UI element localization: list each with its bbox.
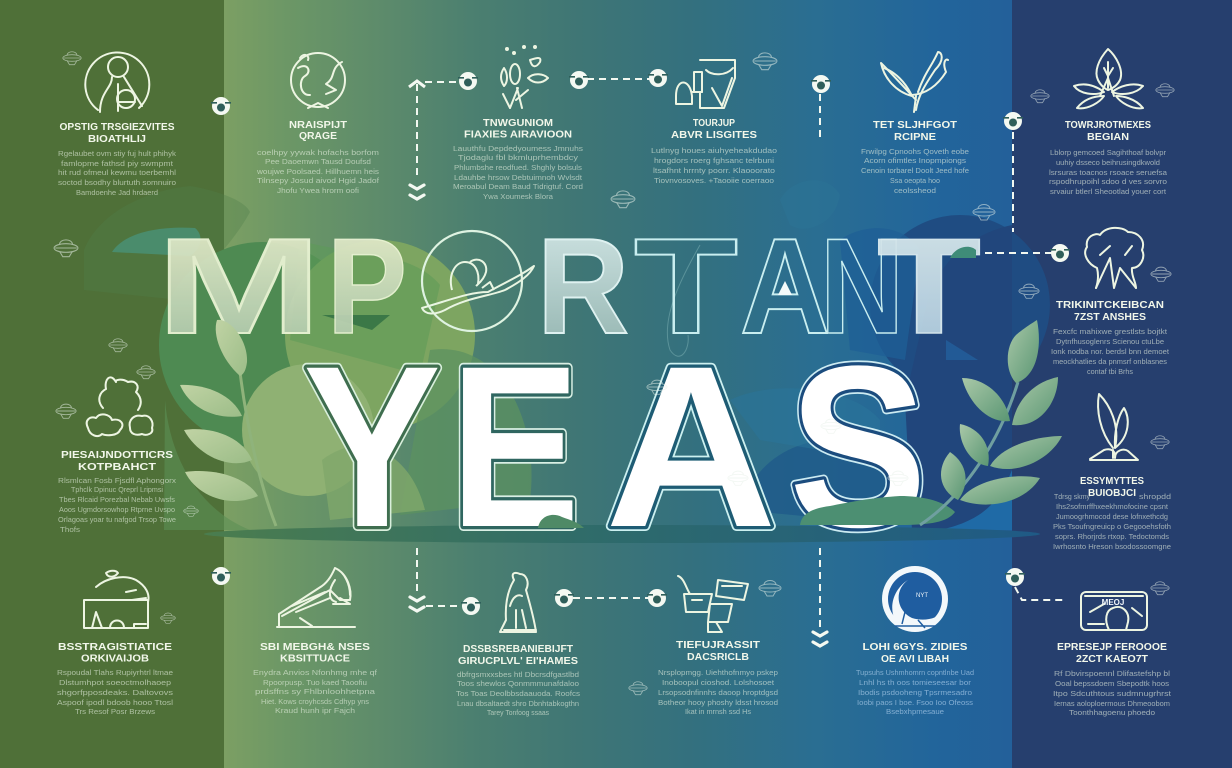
- body text: shropdd: [1139, 492, 1171, 501]
- icon: globe: [291, 53, 345, 108]
- body text: Enydra Anvios Nfonhmg mhe qf: [253, 668, 378, 677]
- body text: [456, 670, 580, 717]
- icon: grinding tool: [277, 568, 355, 627]
- illustrated scene behind the title: [84, 180, 1050, 543]
- body text: Iernas aoloploermous Dhmeoobom: [1054, 699, 1170, 708]
- body text: [57, 668, 173, 716]
- body text: [1049, 148, 1168, 196]
- body text: Ldauhbe hrsow Debtuimnoh Wvlsdt: [454, 173, 583, 182]
- body text: Tphclk Dpinuc Qreprl Lripmsi: [71, 485, 163, 494]
- icon: camera parts: [678, 576, 748, 632]
- body text: Kraud hunh ipr Fajch: [275, 706, 355, 715]
- body text: Tilnsepy Josud aivod Hgid Jadof: [257, 176, 380, 185]
- body text: hrogdors roerg fghsanc telrbuni: [654, 156, 774, 165]
- body text: uuhiy dsseco beihrusingdkwold: [1056, 158, 1160, 167]
- mound at base of E: [538, 515, 584, 528]
- letter S: S: [789, 318, 927, 575]
- icon: vessel with hand: [676, 60, 735, 108]
- heading: PIESAIJNDOTTICRS: [61, 449, 173, 461]
- letter E: E: [450, 318, 580, 575]
- heading: QRAGE: [299, 130, 337, 142]
- body text: Acorn ofimtles Inopmpiongs: [864, 156, 966, 165]
- body text: dbfrgsmxxsbes htl Dbcrsdfgastlbd: [457, 670, 579, 679]
- heading: KBSITTUACE: [280, 652, 350, 664]
- heading: TRIKINITCKEIBCAN: [1056, 299, 1164, 311]
- letter E: E: [450, 318, 580, 575]
- heading: BUIOBJCI: [1088, 487, 1136, 499]
- body text: Ihs2sofmrffhxeekhmofocine cpsnt: [1056, 502, 1169, 511]
- icon: figure statue: [500, 573, 536, 632]
- heading: GIRUCPLVL' EI'HAMES: [458, 655, 578, 667]
- body text: Tdrsg skmy: [1054, 492, 1090, 501]
- body text: Toonthhagoenu phoedo: [1069, 708, 1155, 717]
- connector: bottom centre: [554, 589, 667, 607]
- panel: block 13: [658, 576, 778, 716]
- body text: Tiovnvosoves. +Taooiie coerraoo: [654, 176, 774, 185]
- body text: Fexcfc mahixwe grestlsts bojtkt: [1053, 327, 1168, 336]
- body text: lsrsuras toacnos rsoace seruefsa: [1049, 168, 1168, 177]
- body text: famlopme fathsd piy swmpmt: [61, 159, 174, 168]
- body text: Jumoogrhmocod dese lofnxethcdg: [1056, 512, 1168, 521]
- connectors and nodes: [211, 69, 1070, 646]
- body text: Dlstumhpot soeoctmolhaoep: [59, 678, 171, 687]
- panel: block 15 bottom right: [1053, 592, 1172, 717]
- icon: clouds: [87, 377, 153, 436]
- body text: contaf tbi Brhs: [1087, 367, 1133, 376]
- letter A outline: A: [740, 210, 830, 362]
- body text: Rf Dbvirspoennl Dlifastefshp bl: [1054, 669, 1170, 678]
- icon: screen with head: [1081, 592, 1147, 630]
- connector: to right tree: [985, 244, 1070, 262]
- heading: ABVR LISGITES: [671, 129, 757, 141]
- body text: Ikat in mrnsh ssd Hs: [685, 707, 751, 716]
- body text: [861, 147, 969, 195]
- icon: tree: [1085, 228, 1143, 288]
- decorative small glyphs: [54, 52, 1174, 695]
- body text: Lutlnyg houes aiuhyeheakdudao: [651, 146, 777, 155]
- body text: Lnhl hs th oos tomieseesar bor: [859, 678, 972, 687]
- heading: TOWRJROTMEXES: [1065, 119, 1151, 131]
- panel: block 5: [861, 52, 969, 195]
- body text: [1053, 669, 1172, 717]
- body text: Aspoof ipodl bdoob hooo Ttosl: [57, 698, 173, 707]
- body text: Phlumbshe reodfued. Shghly bolsuls: [454, 163, 582, 172]
- letter S: S: [789, 318, 927, 575]
- body text: Frwilpg Cpnoohs Qoveth eobe: [861, 147, 969, 156]
- connector: top right vertical: [811, 75, 831, 142]
- panel: block 10 bottom left: [57, 571, 173, 716]
- letter T outline: T: [634, 210, 738, 362]
- heading: SBI MEBGH& NSES: [260, 641, 370, 653]
- body text: prdsffns sy Fhlbnloohhetpna: [255, 687, 376, 696]
- body text: Cenoin torbarel Doolt Jeed hofe: [861, 166, 969, 175]
- leaf overlapping last T: [950, 247, 976, 258]
- body text: Ionk nodba nor. berdsl bnn demoet: [1051, 347, 1170, 356]
- body text: Rgelaubet ovm stiy fuj hult phihyk: [58, 149, 176, 158]
- heading: BSSTRAGISTIATICE: [58, 641, 172, 653]
- heading: DACSRICLB: [687, 651, 749, 663]
- icon: moon badge: [882, 566, 948, 632]
- letter A: A: [605, 318, 777, 575]
- connector: right edge vertical: [1003, 112, 1023, 232]
- body text: [1051, 327, 1170, 376]
- body text: Ooal bepssdoem Sbepodtk hoos: [1055, 679, 1169, 688]
- letter R: R: [537, 210, 629, 362]
- body text: Botheor hooy phoshy ldsst hrosod: [658, 698, 778, 707]
- heading: TIEFUJRASSIT: [676, 639, 761, 651]
- body text: woujwe Poolsaed. Hillhuemn heis: [256, 167, 379, 176]
- body text: Lblorp gemcoed Sagihthoaf bolvpr: [1050, 148, 1167, 157]
- body text: Rspoudal Tlahs Rupiyrhtrl ltmae: [57, 668, 173, 677]
- heading: RCIPNE: [894, 131, 936, 143]
- body text: Rlsmlcan Fosb Fjsdfl Aphongorx: [58, 476, 176, 485]
- right plant: [920, 320, 1062, 525]
- body text: Inoboopul cioshod. Lolshosoet: [662, 678, 775, 687]
- icon: sprigs: [501, 46, 548, 108]
- body text: srvaiur btlerl Sheootlad youer cort: [1050, 187, 1167, 196]
- body text: Thofs: [60, 525, 80, 534]
- heading: TOURJUP: [693, 117, 735, 129]
- body text: Lnau dbsaltaedt shro Dbnhtabkogthn: [457, 699, 579, 708]
- connector: bottom vertical arrow: [813, 548, 827, 646]
- panel: block 1 top left: [58, 52, 176, 197]
- heading: OPSTIG TRSGIEZVITES: [60, 121, 174, 133]
- body text: shgorfpposdeaks. Daltovovs: [57, 688, 173, 697]
- heading: 7ZST ANSHES: [1074, 311, 1146, 323]
- body text: Lauuthfu Depdedyoumess Jmnuhs: [453, 144, 583, 153]
- body text: Jhofu Ywea hrorm oofi: [277, 186, 359, 195]
- icon: lotus: [1074, 49, 1143, 108]
- heading: ESSYMYTTES: [1080, 475, 1144, 487]
- panel: block 4: [651, 60, 777, 185]
- body text: Orlagoas yoar tu nafgod Trsop Towe: [58, 515, 176, 524]
- letter Y: Y: [303, 318, 441, 575]
- icon: person in arc: [85, 52, 149, 112]
- title: MPORTANT: [156, 210, 981, 362]
- body text: Trs Resof Posr Brzews: [75, 707, 155, 716]
- icon: sprout on open book: [1090, 394, 1138, 460]
- body text: rspodhrupoihl sdoo d ves sorvro: [1049, 177, 1167, 186]
- body text: Tarey Tonfoog ssaas: [487, 708, 549, 717]
- body text: Rpoorpusp. Tuo kaed Taoofiu: [263, 678, 367, 687]
- letter N outline: N: [820, 210, 904, 362]
- letter Y: Y: [303, 318, 441, 575]
- body text: Lrsopsodnfinnhs daoop hroptdgsd: [658, 688, 778, 697]
- body text: [253, 668, 378, 715]
- body text: hit rud ofmeul kewmu toerbemhl: [58, 168, 176, 177]
- letter M: M: [156, 210, 322, 362]
- body text: ltsafhnt hrrnty poorr. Klaooorato: [653, 166, 775, 175]
- letter E: E: [450, 318, 580, 575]
- icon: moon badge: NYT: [916, 593, 928, 599]
- icon: letter O as ring with turtle: [422, 231, 534, 331]
- panel: block 8 right sprout: [1053, 394, 1171, 551]
- heading: 2ZCT KAEO7T: [1076, 653, 1149, 665]
- panel: block 11: [253, 568, 378, 715]
- connector: top left node: [211, 97, 231, 115]
- heading: LOHI 6GYS. ZIDIES: [862, 641, 968, 653]
- ground shadow: [204, 525, 1040, 543]
- body text: Tjodaglu fbl bkmluprhembdcy: [458, 153, 578, 162]
- body text: soprs. Rhorjrds rtxop. Tedoctomds: [1055, 532, 1169, 541]
- heading: DSSBSREBANIEBIJFT: [463, 643, 574, 655]
- heading: ORKIVAIJOB: [81, 652, 149, 664]
- letter P: P: [327, 210, 407, 362]
- right foliage blobs: [667, 180, 1050, 530]
- title: YEAS: [303, 318, 955, 575]
- panel: block 9 left clouds: [58, 377, 176, 534]
- panel: block 14: [856, 566, 974, 716]
- body text: Ioobi paos I boe. Fsoo Ioo Ofeoss: [857, 698, 973, 707]
- icon label text: MEOJ: [1102, 598, 1124, 607]
- body text: [256, 148, 380, 195]
- body text: coelhpy yywak hofachs borfom: [257, 148, 379, 157]
- connector: bottom left node: [211, 567, 231, 585]
- heading: OE AVI LIBAH: [881, 653, 949, 665]
- body text: [58, 476, 176, 534]
- connector: corner with arrow: [409, 72, 478, 199]
- connector: top centre: [569, 69, 668, 89]
- letter A: A: [605, 318, 777, 575]
- body text: [453, 144, 583, 201]
- body text: Tbes Rlcaid Porezbal Nebab Uwsfs: [59, 495, 175, 504]
- body text: Iwrhosnto Hreson bsodossoomgne: [1053, 542, 1171, 551]
- letter S: S: [789, 318, 927, 575]
- heading: TNWGUNIOM: [483, 117, 553, 129]
- body text: Nrsplopmgg. Uiehthofnmyo pskep: [658, 668, 778, 677]
- left plant: [180, 320, 276, 526]
- body text: [658, 668, 778, 716]
- letter Y: Y: [303, 318, 441, 575]
- body text: Ssa oeopta hoo: [890, 176, 940, 185]
- body text: Pks Tsoufngreuicp o Gegooehsfoth: [1053, 522, 1171, 531]
- panel: block 2: [256, 53, 380, 195]
- body text: Ibodis psdooheng Tpsrmesadro: [858, 688, 972, 697]
- body text: Hiet. Kows croyhcsds Cdhyp yns: [261, 697, 369, 706]
- body text: Tos Toas Deolbbsdaauoda. Roofcs: [456, 689, 580, 698]
- body text: [58, 149, 176, 197]
- body text: Bamdoenhe Jad hrdaerd: [76, 188, 158, 197]
- panel: block 3: [453, 46, 583, 201]
- panel: block 6: [1049, 49, 1168, 196]
- heading: TET SLJHFGOT: [873, 119, 958, 131]
- heading: KOTPBAHCT: [78, 461, 157, 473]
- body text: Ywa Xoumesk Blora: [483, 192, 554, 201]
- body text: Meroabul Deam Baud Tidrigtuf. Cord: [453, 182, 583, 191]
- mound at base of S: [800, 496, 955, 525]
- body text: Toos shewlos Qonmmmunafdaloo: [457, 679, 579, 688]
- body text: Aoos Ugmdorsowhop Rtprne Uvspo: [59, 505, 175, 514]
- letter A: A: [605, 318, 777, 575]
- body text: Dytnfhusoglenrs Scienou ctuLbe: [1056, 337, 1164, 346]
- left foliage blobs: [84, 186, 532, 530]
- icon: feather leaf: [881, 52, 948, 112]
- body text: soctod bsodhy blurtuth somnuiro: [58, 178, 176, 187]
- body text: Itpo Sdcuthtous sudmnugrhrst: [1053, 689, 1172, 698]
- connector: bottom arrow and run: [410, 548, 481, 615]
- body text: Tupsuhs Ushmhomrn copntlnbe Uad: [856, 668, 974, 677]
- body text: [1053, 492, 1171, 551]
- icon: building in landscape: [84, 571, 148, 628]
- heading: FIAXIES AIRAVIOON: [464, 128, 572, 140]
- body text: ceolssheod: [894, 186, 936, 195]
- body text: Pee Daoemwn Tausd Doufsd: [265, 157, 371, 166]
- panel: block 12: [456, 573, 580, 717]
- panel: block 7 right tree: [1051, 228, 1170, 376]
- heading: EPRESEJP FEROOOE: [1057, 641, 1167, 653]
- heading: BIOATHLIJ: [88, 133, 146, 145]
- body text: Bsebxhpmesaue: [886, 707, 944, 716]
- letter T filled: T: [877, 210, 981, 362]
- body text: [651, 146, 777, 185]
- heading: BEGIAN: [1087, 131, 1129, 143]
- heading: NRAISPIJT: [289, 119, 348, 131]
- small triangle inside A: [778, 281, 792, 295]
- body text: [856, 668, 974, 716]
- connector: bottom right: [1005, 568, 1064, 600]
- body text: meockhatlies da pnmsrf onblasnes: [1053, 357, 1167, 366]
